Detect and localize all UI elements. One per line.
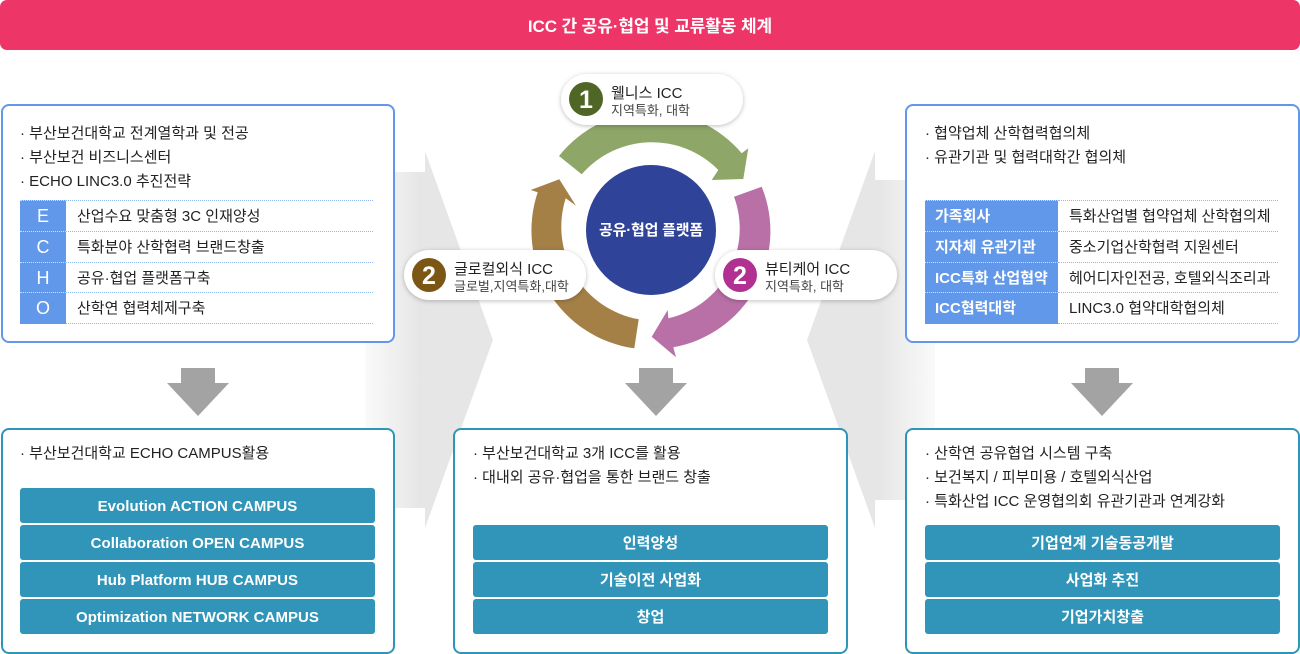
partner table: 가족회사 (935, 208, 990, 225)
bullet list: · ECHO LINC3.0 추진전략 (20, 173, 191, 190)
bullet list: · 부산보건대학교 3개 ICC를 활용 (473, 445, 681, 462)
panel: partners (905, 104, 1300, 343)
ECHO table: O (36, 298, 50, 318)
arrow: green arc (559, 111, 748, 180)
badge: wellness ICC: 1 (579, 86, 593, 114)
ECHO table: 산업수요 맞춤형 3C 인재양성 (77, 208, 260, 225)
cycle diagram (530, 125, 770, 358)
button: 인력양성 (623, 535, 678, 552)
badge: global food ICC: 글로벌,지역특화,대학 (454, 279, 569, 294)
button: Hub Platform HUB CAMPUS (97, 572, 298, 589)
button: 창업 (637, 609, 664, 626)
center circle: 공유·협업 플랫폼 (599, 222, 703, 239)
button: 기술이전 사업화 (600, 572, 701, 589)
title: ICC 간 공유·협업 및 교류활동 체계 (528, 17, 772, 36)
bullet list: · 부산보건대학교 ECHO CAMPUS활용 (20, 445, 269, 462)
button (20, 525, 375, 560)
bullet list: · 유관기관 및 협력대학간 협의체 (925, 149, 1126, 166)
bullet list (20, 125, 249, 190)
panel: industry link (905, 428, 1300, 654)
button: Collaboration OPEN CAMPUS (91, 535, 304, 552)
partner table: ICC특화 산업협약 (935, 270, 1048, 287)
badge: wellness ICC: 지역특화, 대학 (611, 103, 690, 118)
panel: ECHO campus (1, 428, 395, 654)
title (0, 0, 1300, 50)
badge: beauty care ICC: 뷰티케어 ICC (765, 261, 850, 278)
ECHO table: E (37, 206, 49, 226)
partner table: 특화산업별 협약업체 산학협의체 (1069, 208, 1271, 225)
button (20, 562, 375, 597)
ECHO table: H (36, 268, 50, 288)
ECHO table: 공유·협업 플랫폼구축 (77, 270, 210, 287)
bullet list (925, 125, 1126, 166)
button (20, 488, 375, 523)
ECHO table: 특화분야 산학협력 브랜드창출 (77, 239, 265, 256)
bullet list: · 협약업체 산학협력협의체 (925, 125, 1090, 142)
button (473, 599, 828, 634)
bullet list: · 보건복지 / 피부미용 / 호텔외식산업 (925, 469, 1152, 486)
partner table: 중소기업산학협력 지원센터 (1069, 239, 1239, 256)
bullet list: · 특화산업 ICC 운영협의회 유관기관과 연계강화 (925, 493, 1225, 510)
bullet list: · 부산보건대학교 전계열학과 및 전공 (20, 125, 249, 142)
button (473, 525, 828, 560)
badge: wellness ICC: 웰니스 ICC (611, 85, 682, 102)
button: 기업가치창출 (1061, 609, 1144, 626)
arrow: brown arc (531, 179, 639, 348)
ECHO table: C (36, 237, 50, 257)
badge: wellness ICC (561, 74, 743, 125)
panel: ECHO strategy (1, 104, 395, 343)
partner table: LINC3.0 협약대학협의체 (1069, 300, 1225, 317)
partner table (925, 200, 1278, 324)
badge: global food ICC (404, 250, 586, 300)
ECHO table: 산학연 협력체제구축 (77, 300, 205, 317)
button (20, 599, 375, 634)
badge: beauty care ICC: 지역특화, 대학 (765, 279, 844, 294)
arrow: pink arc (652, 187, 770, 357)
badge: global food ICC: 글로컬외식 ICC (454, 261, 553, 278)
button (925, 562, 1280, 597)
button (925, 525, 1280, 560)
arrow: down center (625, 368, 687, 416)
bullet list: · 산학연 공유협업 시스템 구축 (925, 445, 1112, 462)
arrow: down left (167, 368, 229, 416)
bullet list: · 대내외 공유·협업을 통한 브랜드 창출 (473, 469, 711, 486)
bullet list: · 부산보건 비즈니스센터 (20, 149, 171, 166)
button: Optimization NETWORK CAMPUS (76, 609, 319, 626)
arrow: down right (1071, 368, 1133, 416)
bullet list (473, 445, 711, 486)
badge: global food ICC: 2 (422, 262, 436, 290)
panel: ICC usage (453, 428, 848, 654)
badge: beauty care ICC (715, 250, 897, 300)
button (925, 599, 1280, 634)
bullet list (925, 445, 1225, 510)
badge: beauty care ICC: 2 (733, 262, 747, 290)
partner table: 헤어디자인전공, 호텔외식조리과 (1069, 270, 1271, 287)
button: 사업화 추진 (1066, 572, 1139, 589)
button: 기업연계 기술동공개발 (1031, 535, 1174, 552)
center circle (586, 165, 716, 295)
partner table: ICC협력대학 (935, 300, 1016, 317)
ECHO table (20, 200, 373, 324)
button: Evolution ACTION CAMPUS (98, 498, 297, 515)
partner table: 지자체 유관기관 (935, 239, 1036, 256)
button (473, 562, 828, 597)
